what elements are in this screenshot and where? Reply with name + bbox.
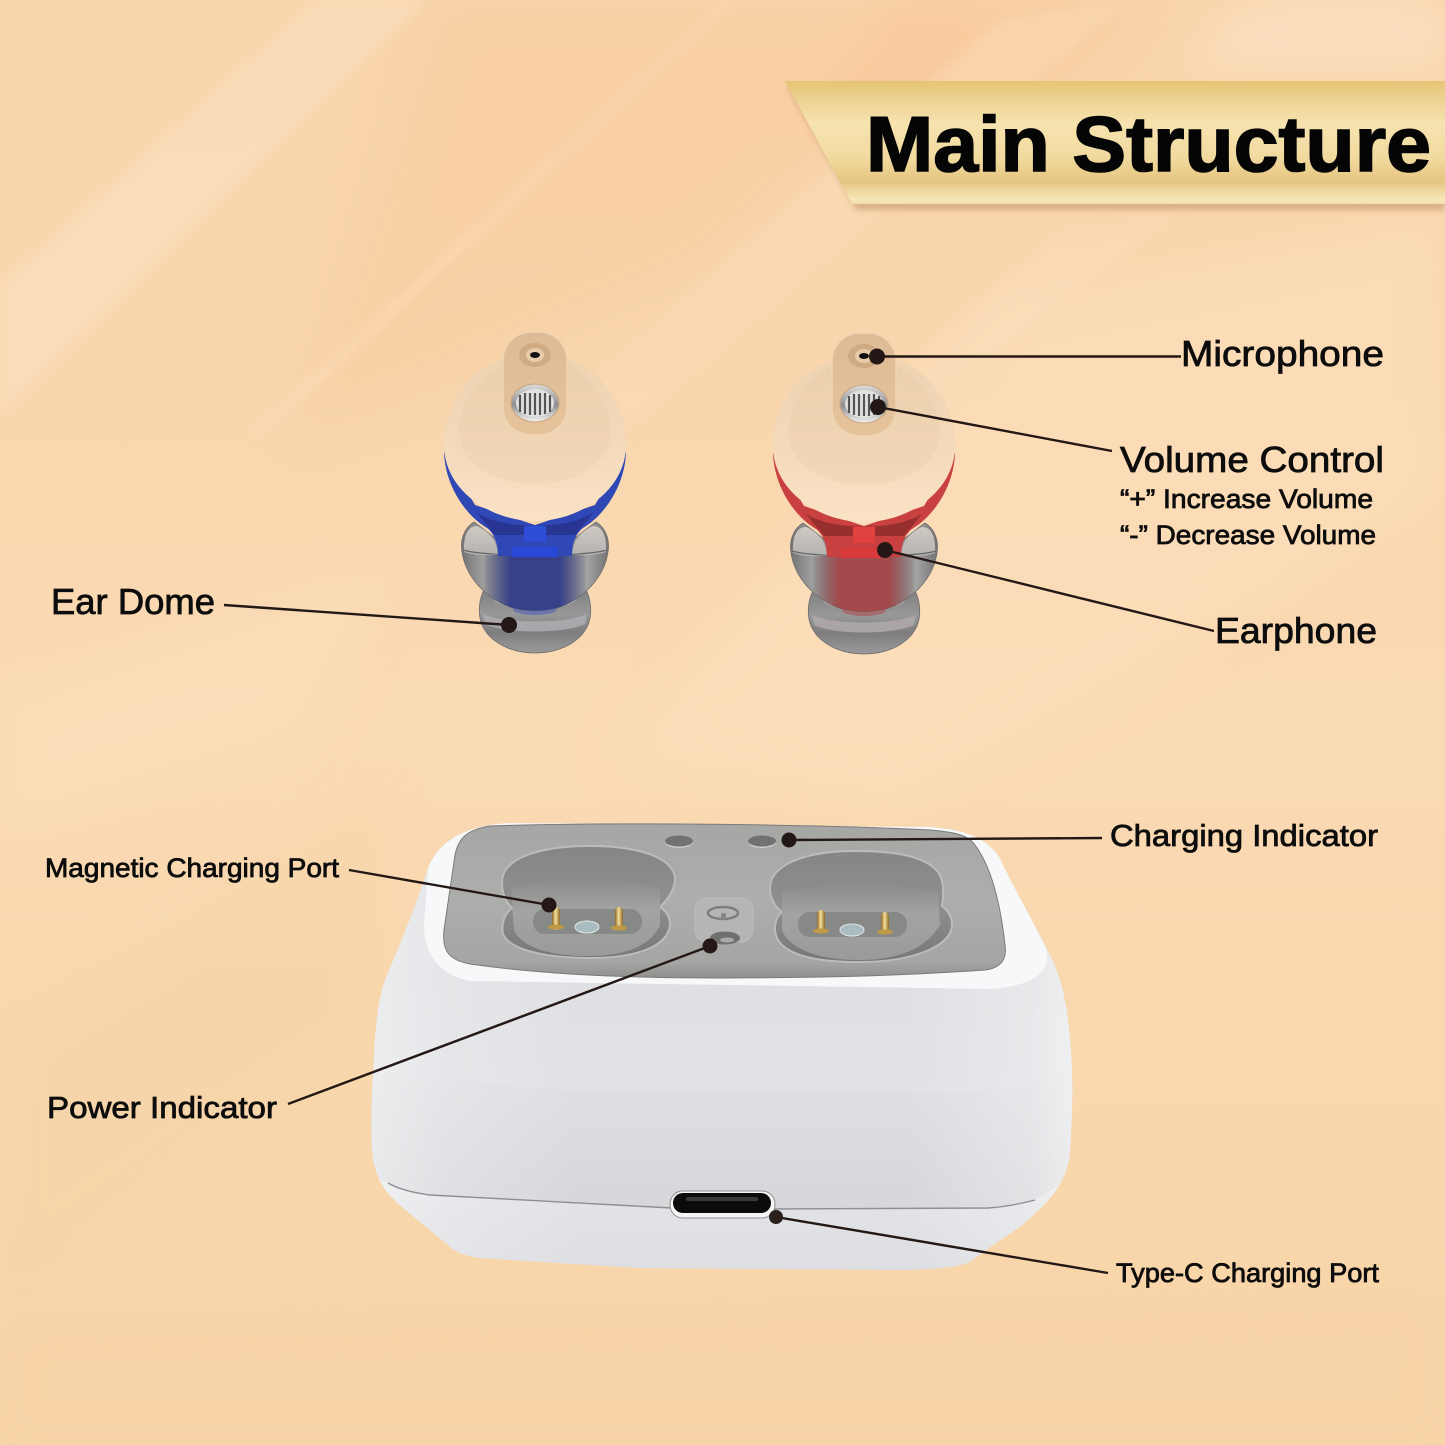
- callout: power indicator: Power Indicator: [47, 1090, 277, 1125]
- case body: [360, 815, 1090, 1285]
- callout: earphone: Earphone: [1215, 610, 1377, 651]
- callout: microphone: Microphone: [1181, 333, 1384, 374]
- callout: earphone: [877, 542, 1377, 651]
- callout: ear dome: [51, 581, 517, 633]
- callout: volume control: “-” Decrease Volume: [1120, 520, 1376, 550]
- left charging well: [502, 846, 675, 958]
- callout: power indicator: [47, 938, 718, 1125]
- right charging well: [770, 851, 952, 962]
- power button and power LED: [695, 898, 753, 944]
- ear dome: [462, 522, 608, 611]
- callout: charging indicator: Charging Indicator: [1110, 818, 1378, 853]
- callout: magnetic charging port: [45, 853, 556, 912]
- callout: volume control: Volume Control: [1120, 439, 1384, 480]
- rear ear dome tip: [479, 588, 591, 653]
- grey top panel: [444, 824, 1005, 978]
- cream shell: [444, 354, 626, 521]
- Type-C port: [670, 1191, 775, 1218]
- title banner: [785, 81, 1445, 210]
- ear dome: [790, 523, 938, 612]
- callout: magnetic charging port: Magnetic Charging Port: [45, 853, 340, 883]
- left earbud (blue): [444, 332, 626, 653]
- right earbud (red): [773, 333, 955, 654]
- rear ear dome tip: [808, 589, 920, 654]
- callout: microphone: [869, 333, 1384, 374]
- indicator holes: [665, 836, 776, 848]
- charging case: [360, 815, 1090, 1285]
- red earphone body: [773, 453, 955, 612]
- callout: volume control: [870, 399, 1384, 550]
- cream shell: [773, 355, 955, 522]
- callout: volume control: “+” Increase Volume: [1120, 484, 1373, 514]
- callout: type-C charging port: [769, 1210, 1379, 1288]
- callout: charging indicator: [782, 818, 1378, 853]
- title: Main Structure: [866, 100, 1431, 188]
- volume dial: [511, 384, 559, 422]
- control tab: [503, 332, 567, 435]
- control tab: [832, 333, 896, 436]
- volume dial: [840, 385, 888, 423]
- blue earphone body: [444, 452, 626, 611]
- callout: ear dome: Ear Dome: [51, 581, 215, 622]
- callout: type-C charging port: Type-C Charging Port: [1116, 1258, 1379, 1288]
